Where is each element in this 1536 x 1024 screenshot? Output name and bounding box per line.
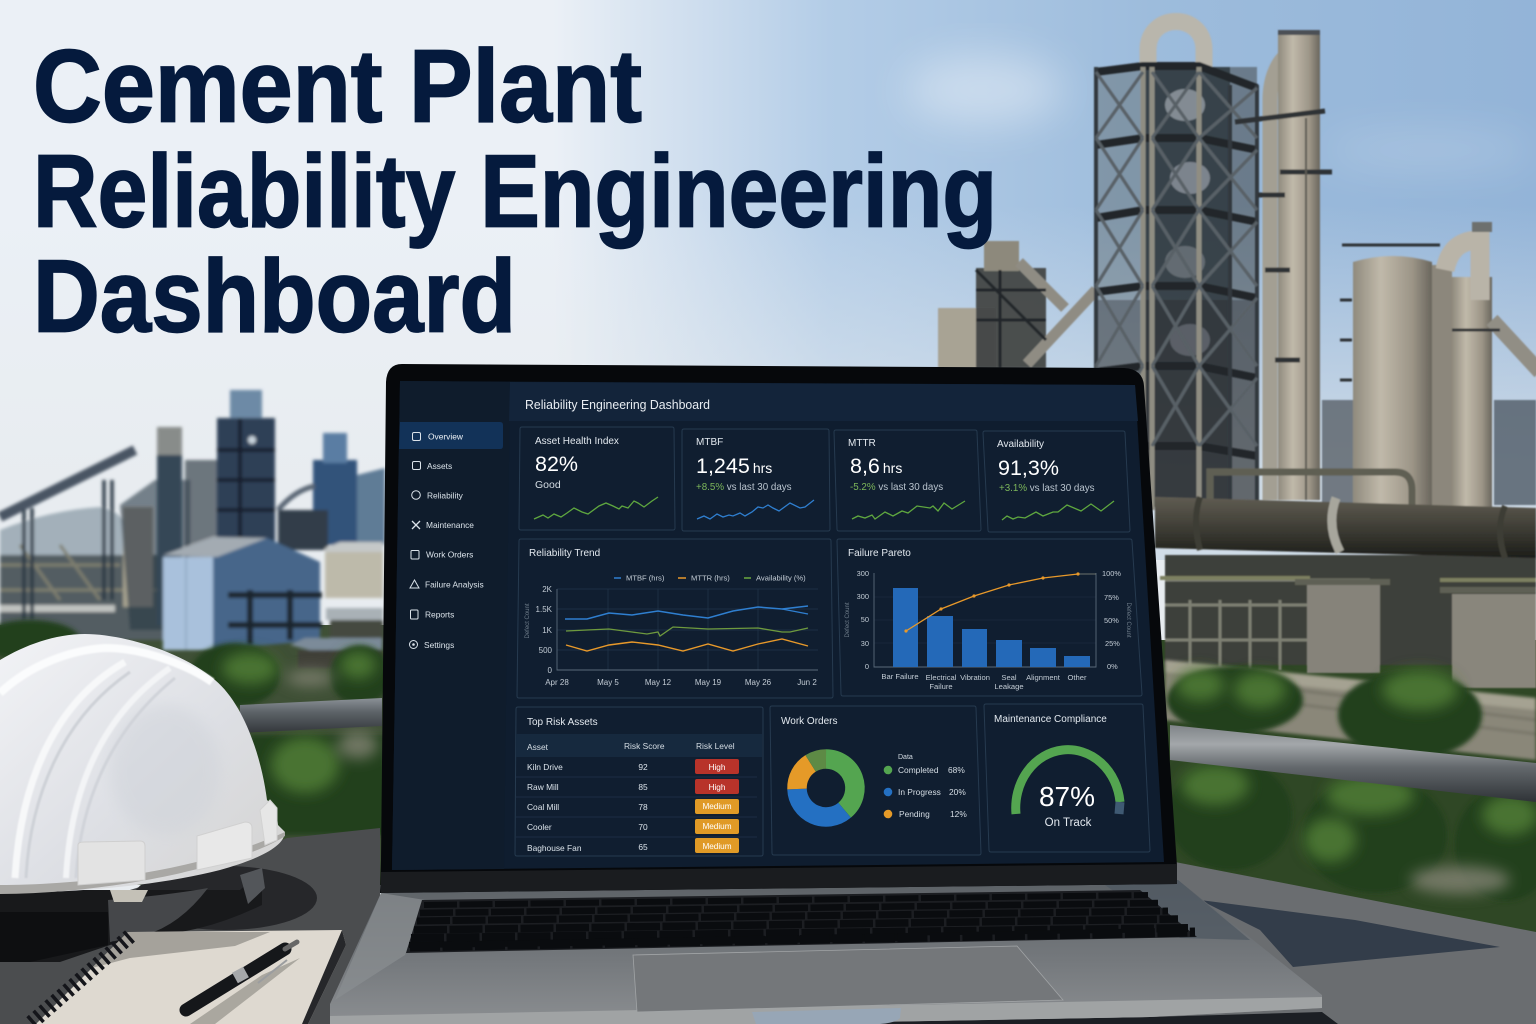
panel: maintenance compliance: 87%: [1039, 781, 1095, 812]
panel: failure pareto: Failure Pareto: [848, 548, 911, 559]
pen: [186, 942, 300, 1024]
sidebar: [392, 381, 510, 870]
risk badges: High: [709, 763, 726, 772]
nav: settings: [410, 640, 454, 650]
title: Cement Plant: [33, 28, 642, 143]
nav: work orders: Work Orders: [426, 550, 473, 560]
table rows: 85: [638, 782, 648, 792]
hinge chin: [381, 864, 1177, 893]
table rows: Kiln Drive: [527, 762, 563, 772]
blue building: [163, 537, 322, 650]
table surface: [0, 828, 1536, 1024]
card: asset health index: 82%: [535, 452, 578, 476]
screen: [392, 381, 1164, 870]
line chart: Jun 2: [797, 678, 817, 687]
card: asset health index: [519, 427, 675, 530]
donut legend: 68%: [948, 765, 965, 775]
nav: settings: Settings: [424, 640, 454, 650]
pareto chart: Defect Count: [1125, 602, 1131, 638]
laptop base: [330, 880, 1322, 1024]
panel: top risk assets: [515, 707, 763, 856]
donut legend: Completed: [898, 765, 939, 775]
nav: reliability: [412, 490, 464, 500]
risk badges: Medium: [702, 802, 732, 811]
card: MTBF: 1,245hrs: [696, 454, 772, 478]
nav: reliability: Reliability: [427, 490, 464, 500]
table header: Asset: [527, 742, 549, 752]
pareto chart: [845, 569, 1131, 691]
line chart: 500: [539, 646, 553, 655]
background: tree highlights: [222, 651, 1536, 894]
pareto chart: 30: [861, 639, 869, 648]
donut chart: [797, 759, 855, 817]
table rows: 65: [638, 842, 648, 852]
hills and haze: [0, 507, 175, 650]
table rows: 78: [638, 802, 648, 812]
helmet shading: [110, 705, 220, 835]
active item background: [399, 422, 503, 449]
title: [33, 28, 997, 353]
pareto chart: Bar Failure: [881, 672, 919, 681]
donut legend: 20%: [949, 787, 966, 797]
pareto chart: Electrical: [926, 673, 957, 682]
donut legend: 12%: [950, 809, 967, 819]
pareto chart: Defect Count: [845, 602, 851, 638]
card: MTBF: [682, 429, 830, 531]
legend: MTBF (hrs): [626, 574, 665, 582]
nav: assets: [412, 461, 452, 471]
card: availability: [983, 431, 1130, 532]
hard hat: [0, 634, 317, 962]
pareto chart: Alignment: [1026, 673, 1061, 682]
small right buildings: [290, 542, 383, 668]
line chart: 2K: [542, 585, 553, 594]
conveyor and towers: [0, 390, 385, 630]
laptop: [330, 364, 1322, 1024]
pareto chart: 50: [861, 615, 869, 624]
card: MTTR: MTTR: [848, 438, 876, 449]
title: Dashboard: [33, 238, 516, 353]
panel: top risk assets: Top Risk Assets: [527, 717, 598, 728]
notebook and pen: [30, 930, 346, 1024]
background: right cement plant: [938, 22, 1536, 688]
bars: [893, 588, 1090, 667]
gauge: [1016, 750, 1120, 814]
pareto chart: 300: [857, 569, 869, 578]
nav: maintenance: Maintenance: [426, 520, 474, 530]
legend: Availability (%): [756, 574, 806, 582]
pareto chart: 0%: [1107, 662, 1118, 671]
nav: overview: [412, 432, 464, 442]
line chart: [525, 585, 818, 687]
pareto chart: 50%: [1104, 616, 1119, 625]
nav: assets: Assets: [427, 461, 452, 471]
risk badges: Medium: [702, 842, 732, 851]
line chart: Defect Count: [525, 603, 531, 639]
nav: overview: Overview: [428, 432, 464, 442]
trackpad: [633, 946, 1063, 1012]
line chart: May 19: [695, 678, 722, 687]
risk badges: Medium: [702, 822, 732, 831]
background: left plant: [0, 390, 385, 668]
table rows: Raw Mill: [527, 782, 559, 792]
pareto chart: 100%: [1102, 569, 1121, 578]
card: availability: +3.1% vs last 30 days: [999, 483, 1095, 494]
panel: maintenance compliance: [984, 704, 1150, 852]
right silos: [1322, 222, 1536, 520]
donut legend: Data: [898, 754, 913, 761]
panel: failure pareto: [837, 539, 1142, 696]
table header: Risk Score: [624, 741, 665, 751]
table rows: Coal Mill: [527, 802, 559, 812]
pareto chart: Seal: [1001, 673, 1017, 682]
sparkline: [1002, 501, 1114, 520]
line chart: Apr 28: [545, 678, 569, 687]
card: availability: 91,3%: [998, 456, 1059, 480]
keyboard: [406, 890, 1197, 953]
card: MTBF: MTBF: [696, 437, 723, 448]
laptop lid and bezel: [380, 364, 1177, 893]
panel: work orders: [770, 706, 981, 855]
donut legend: Pending: [899, 809, 930, 819]
pareto chart: 25%: [1105, 639, 1120, 648]
header bar: Reliability Engineering Dashboard: [525, 398, 710, 412]
pareto chart: Other: [1068, 673, 1087, 682]
table rows: 70: [638, 822, 648, 832]
notch: [752, 1008, 901, 1024]
panel: maintenance compliance: On Track: [1045, 817, 1092, 829]
line chart: May 12: [645, 678, 672, 687]
title: Reliability Engineering: [33, 133, 997, 248]
background: trees: [0, 620, 1536, 901]
card: asset health index: Good: [535, 479, 561, 491]
background: road and retaining wall: [1165, 660, 1536, 760]
helmet ridges: [0, 648, 212, 878]
rotary kiln: [1155, 472, 1536, 558]
sparkline: [852, 501, 965, 519]
legend: [614, 574, 806, 582]
rear tower and small silo: [938, 241, 1096, 368]
table rows: Baghouse Fan: [527, 843, 582, 853]
nav: reports: Reports: [425, 610, 454, 620]
railing: [240, 698, 1536, 802]
card: MTTR: -5.2% vs last 30 days: [850, 482, 943, 493]
line chart: 0: [548, 666, 553, 675]
sparkline: [697, 500, 814, 519]
helmet clips: [78, 800, 277, 902]
spiral binding: [30, 936, 130, 1024]
pareto chart: 0: [865, 662, 869, 671]
risk badges: High: [709, 783, 726, 792]
lower steel structure and piers: [1160, 555, 1536, 688]
lattice tower: [1096, 22, 1257, 510]
pareto chart: Leakage: [994, 682, 1024, 691]
line chart: May 26: [745, 678, 772, 687]
table header: [516, 734, 762, 757]
legend: MTTR (hrs): [691, 574, 730, 582]
sparkline: [534, 497, 658, 519]
sidebar navigation: [399, 422, 503, 650]
card: MTBF: +8.5% vs last 30 days: [696, 482, 792, 493]
table rows: Cooler: [527, 822, 552, 832]
background: ground base: [0, 625, 1536, 940]
header bar: [509, 382, 1138, 421]
table rows: [527, 762, 648, 853]
table header: Risk Level: [696, 741, 735, 751]
pareto chart: Failure: [929, 682, 953, 691]
line chart: 1.5K: [536, 605, 553, 614]
card: MTTR: 8,6hrs: [850, 454, 902, 478]
line chart: 1K: [542, 626, 553, 635]
panel: maintenance compliance: Maintenance Compliance: [994, 714, 1107, 725]
nav: failure analysis: Failure Analysis: [425, 580, 484, 590]
nav: reports: [410, 610, 454, 620]
line chart: May 5: [597, 678, 619, 687]
cumulative line: [906, 574, 1078, 631]
card: asset health index: Asset Health Index: [535, 436, 619, 447]
panel: reliability trend: Reliability Trend: [529, 548, 600, 559]
risk badges: [695, 759, 739, 853]
card: availability: Availability: [997, 439, 1044, 450]
pareto chart: 75%: [1104, 593, 1119, 602]
panel: reliability trend: [517, 539, 833, 698]
pareto chart: 300: [857, 592, 869, 601]
card: MTTR: [834, 430, 981, 531]
pareto chart: Vibration: [960, 673, 990, 682]
donut legend: [884, 754, 967, 819]
table rows: 92: [638, 762, 648, 772]
panel: work orders: Work Orders: [781, 716, 838, 727]
tall process column: [1235, 30, 1332, 500]
donut legend: In Progress: [898, 787, 941, 797]
